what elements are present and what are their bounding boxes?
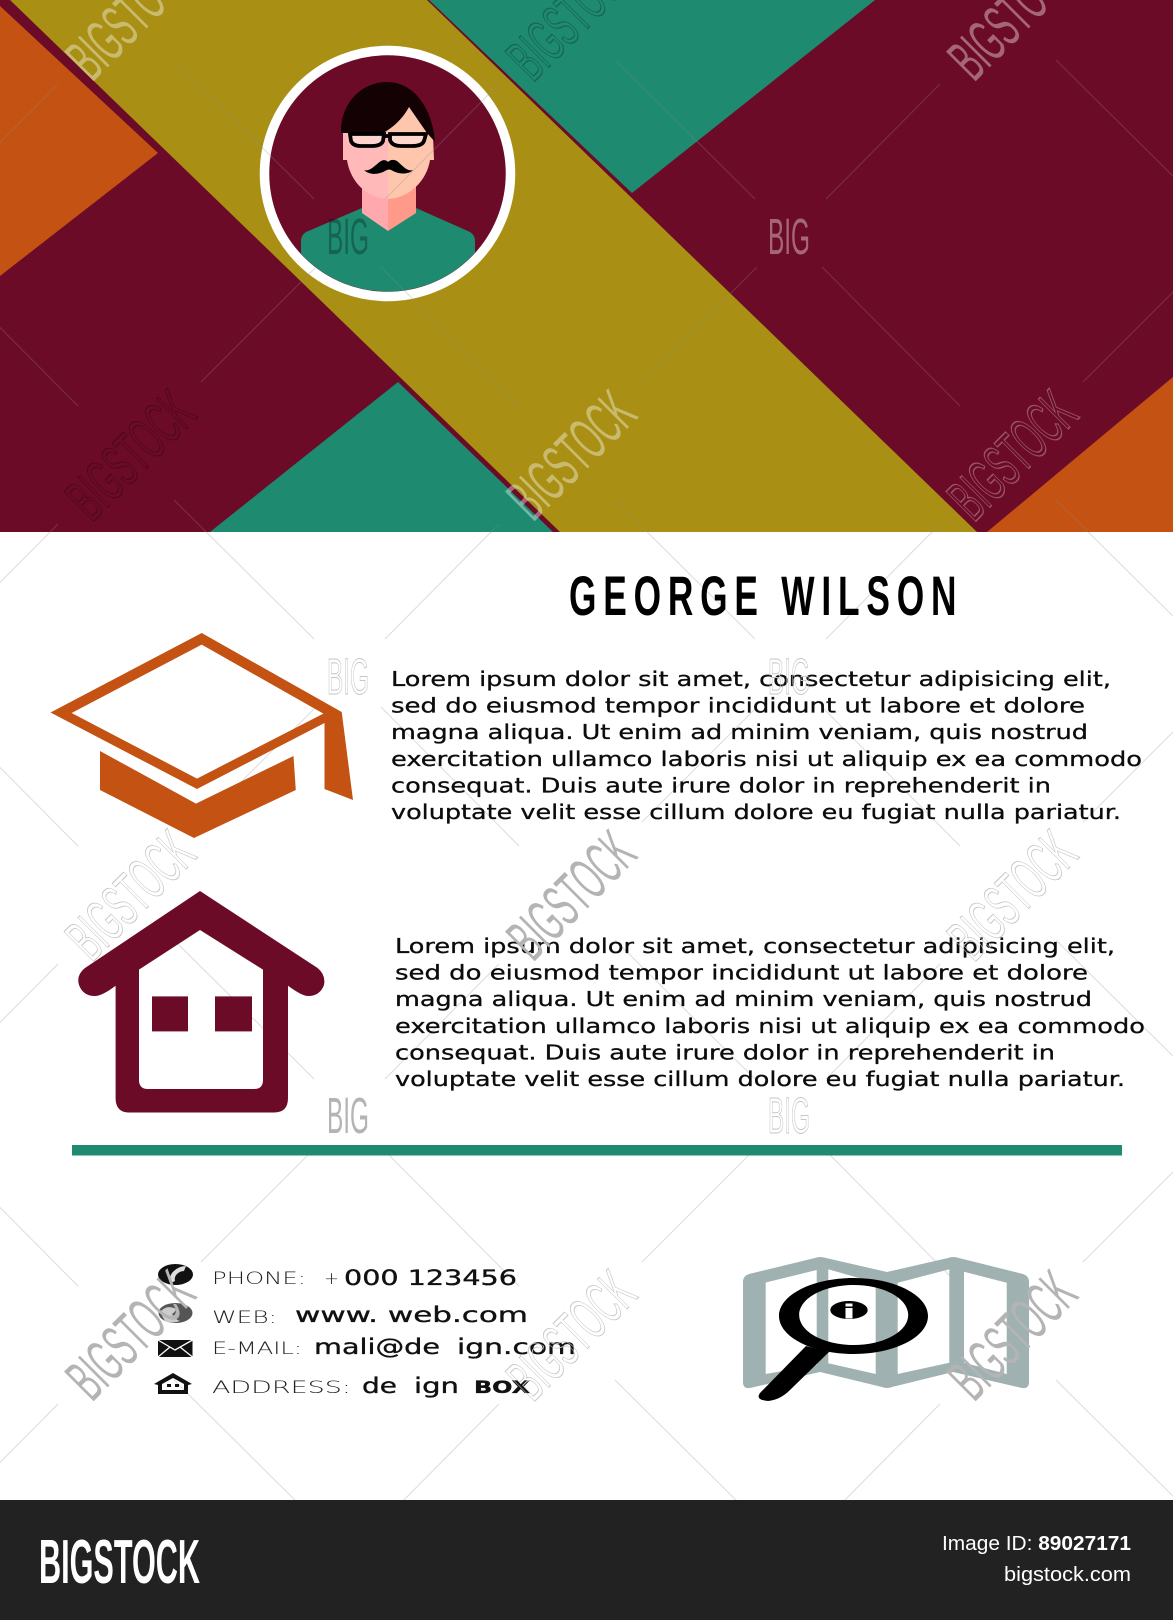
text block: education: Lorem ipsum dolor sit amet, consectetur adipisicing elit, (391, 667, 1111, 691)
footer bar: BIGSTOCK (39, 1528, 200, 1597)
site url: bigstock.com (1004, 1564, 1131, 1586)
watermark: bigstock grid: BIG (327, 648, 369, 705)
orange triangle top left (0, 6, 158, 276)
icon: graduation cap (50, 633, 353, 838)
watermark: bigstock grid: BIGSTOCK (494, 1258, 648, 1412)
folded map (743, 1257, 1029, 1388)
watermark: bigstock grid (53, 0, 1089, 1412)
watermark: bigstock grid: BIG (768, 648, 810, 705)
teal triangle top (429, 0, 875, 193)
contact: address (154, 1373, 530, 1398)
divider bar (72, 1145, 1122, 1156)
watermark: bigstock grid: BIGSTOCK (494, 818, 648, 972)
icon: envelope (158, 1340, 192, 1357)
contact: email (158, 1335, 576, 1359)
panel: geometric header (0, 0, 1173, 532)
glasses (350, 134, 426, 146)
text block: education: magna aliqua. Ut enim ad minim veniam, quis nostrud (391, 720, 1088, 744)
text block: education: consequat. Duis aute irure dolor in reprehenderit in (391, 773, 1051, 797)
olive diagonal band (10, 0, 977, 532)
contact: phone: + (324, 1269, 339, 1289)
face (343, 107, 434, 199)
neck (362, 186, 416, 231)
text block: home: sed do eiusmod tempor incididunt ut labore et dolore (395, 961, 1088, 985)
icon: house (78, 891, 324, 1112)
watermark: bigstock grid: BIG (768, 208, 810, 265)
watermark: bigstock grid: BIGSTOCK (494, 378, 648, 532)
watermark: bigstock grid: BIG (327, 1087, 369, 1144)
contact: address: ign (414, 1374, 459, 1398)
icon: globe (158, 1303, 192, 1323)
watermark: bigstock grid: BIG (768, 1087, 810, 1144)
contact: web (158, 1303, 528, 1328)
magnifier (759, 1278, 928, 1401)
contact: address: de (362, 1374, 397, 1398)
contact: address: ADDRESS: (212, 1378, 351, 1398)
contact: email: ign.com (457, 1335, 576, 1359)
text block: home (395, 934, 1145, 1091)
contact: address: BOX (474, 1378, 530, 1398)
text block: education (391, 667, 1142, 824)
watermark: bigstock grid: BIG (327, 208, 369, 265)
watermark: bigstock grid: BIGSTOCK (53, 818, 207, 972)
avatar portrait (264, 50, 510, 310)
contact: web: www. web.com (295, 1303, 528, 1327)
icon: map with magnifier (743, 1257, 1029, 1401)
text block: home: Lorem ipsum dolor sit amet, consectetur adipisicing elit, (395, 934, 1115, 958)
teal triangle bottom (210, 382, 553, 532)
contact: email: E-MAIL: (212, 1339, 302, 1359)
shirt (301, 208, 475, 292)
text block: home: magna aliqua. Ut enim ad minim veniam, quis nostrud (395, 987, 1092, 1011)
title: GEORGE WILSON (569, 565, 956, 627)
contact: web: WEB: (212, 1308, 277, 1328)
text block: home: voluptate velit esse cillum dolore eu fugiat nulla pariatur. (395, 1067, 1125, 1091)
footer bar (0, 1500, 1173, 1620)
watermark: bigstock grid: BIGSTOCK (53, 378, 207, 532)
contact: phone: PHONE: (212, 1269, 306, 1289)
image id: Image ID: 89027171 (942, 1533, 1131, 1555)
contact: phone (158, 1264, 517, 1290)
text block: education: sed do eiusmod tempor incididunt ut labore et dolore (391, 694, 1085, 718)
watermark: bigstock grid: BIGSTOCK (53, 1258, 207, 1412)
text block: home: consequat. Duis aute irure dolor in reprehenderit in (395, 1040, 1055, 1064)
text block: education: exercitation ullamco laboris nisi ut aliquip ex ea commodo (391, 747, 1142, 771)
text block: home: exercitation ullamco laboris nisi ut aliquip ex ea commodo (395, 1014, 1145, 1038)
icon: phone (158, 1264, 193, 1285)
contact: phone: 000 123456 (344, 1266, 517, 1290)
hair (341, 82, 435, 142)
icon: small house (154, 1373, 192, 1394)
moustache (364, 160, 413, 174)
contact: email: mali@de (314, 1335, 440, 1359)
text block: education: voluptate velit esse cillum dolore eu fugiat nulla pariatur. (391, 800, 1121, 824)
orange triangle bottom right (987, 377, 1173, 532)
